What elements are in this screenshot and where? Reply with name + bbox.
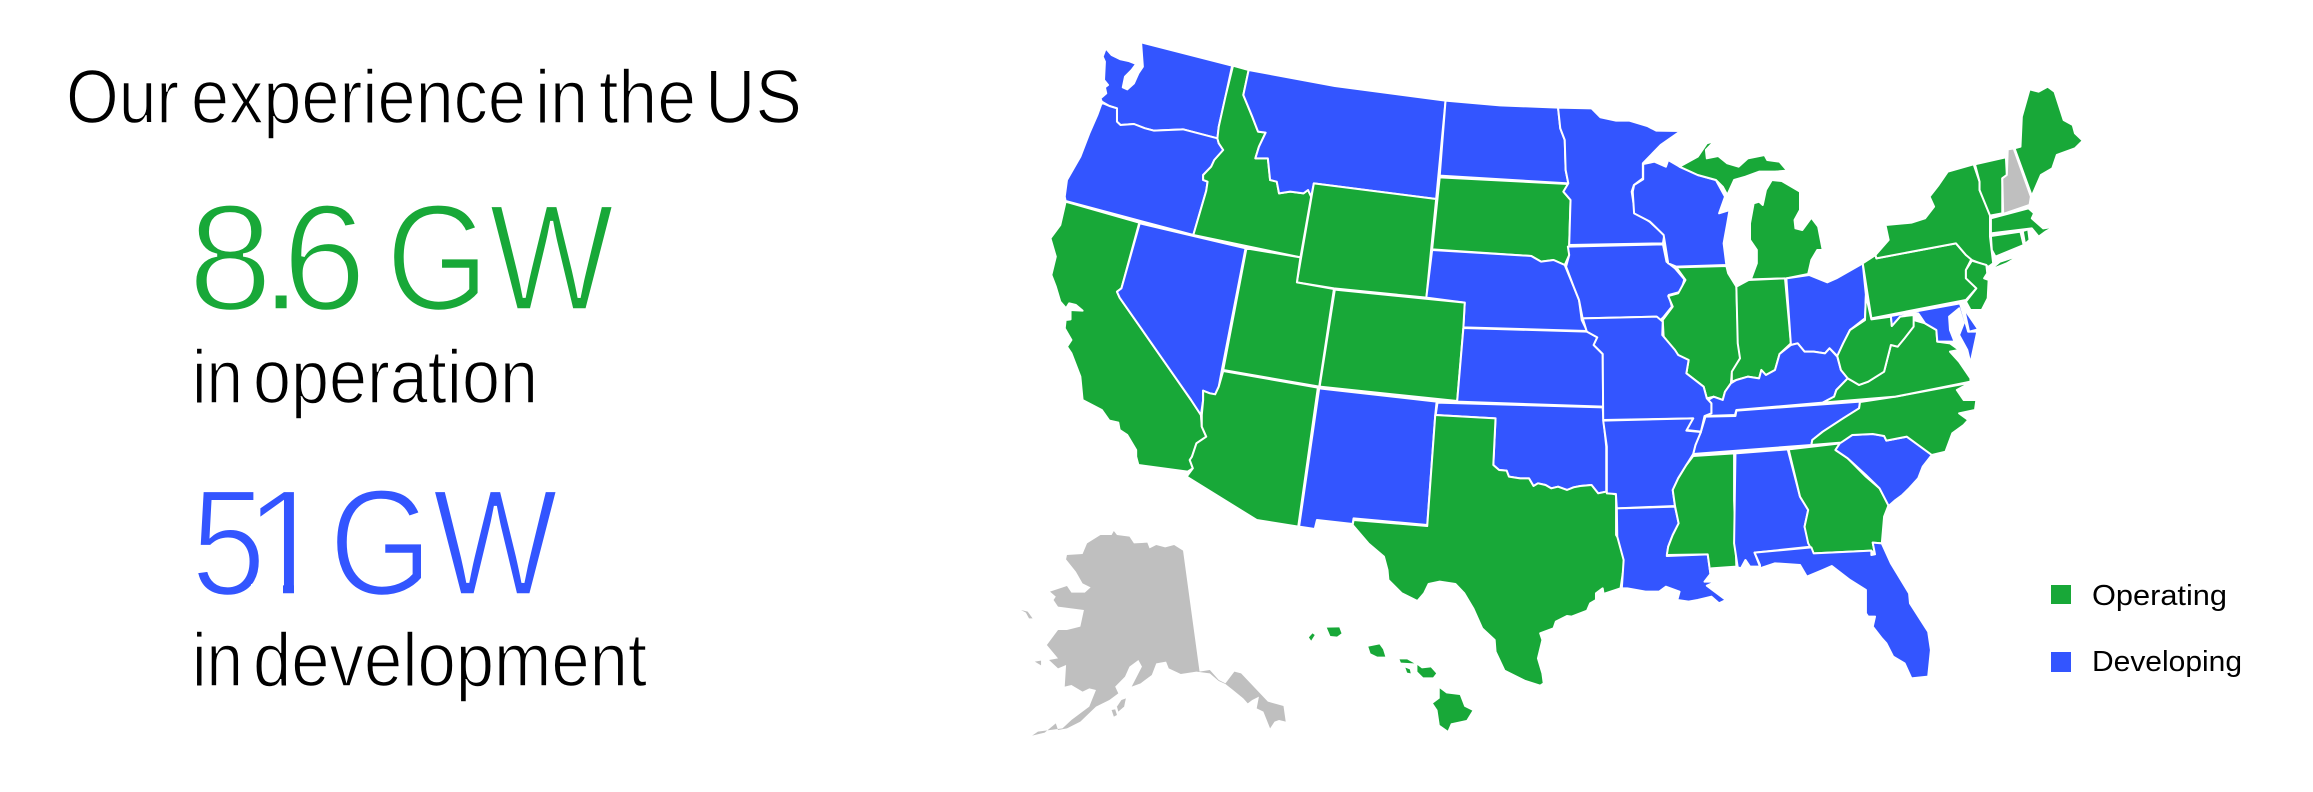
state: Minnesota (1558, 108, 1681, 245)
state: California (1050, 202, 1206, 472)
state: New Jersey (1966, 261, 1989, 310)
state: Vermont (1975, 157, 2007, 216)
state: Texas (1353, 415, 1626, 686)
title: Our (66, 55, 179, 140)
state: Oklahoma (1436, 403, 1606, 493)
state: Pennsylvania (1863, 243, 1976, 318)
state: Wisconsin (1633, 160, 1730, 267)
stat label: in operation: in (192, 335, 243, 420)
stat: 8.6 GW in operation (188, 173, 614, 420)
state: Arkansas (1603, 418, 1701, 508)
state: Rhode Island (2023, 229, 2030, 244)
state: Utah (1223, 248, 1334, 387)
title: experience (191, 55, 526, 140)
state: North Carolina (1811, 383, 1976, 455)
eastern states (1583, 87, 2083, 678)
stat: 51 GW in development (191, 458, 647, 703)
state: Georgia (1789, 443, 1889, 554)
stat value: 51 GW: GW (329, 458, 558, 628)
state: Arizona (1187, 371, 1318, 527)
state: New York, Long Island (1990, 255, 2020, 270)
stat value: 8.6 GW (188, 173, 614, 343)
state: Illinois (1663, 266, 1741, 400)
state: Hawaii (1309, 627, 1472, 731)
state: Nevada (1117, 223, 1246, 415)
stat label: in development: development (253, 618, 647, 703)
state: Wyoming (1297, 183, 1436, 298)
title (66, 55, 802, 140)
state: Kansas (1457, 328, 1603, 407)
state: North Dakota (1440, 101, 1568, 183)
state: Florida (1755, 543, 1931, 678)
state: Indiana (1732, 278, 1791, 382)
state: New Mexico (1299, 388, 1437, 529)
map: US states (1021, 42, 2083, 736)
title: the (599, 55, 696, 140)
state: Mississippi (1667, 453, 1736, 574)
state: Iowa (1566, 244, 1684, 321)
stat label: in development: in (192, 618, 243, 703)
stat label: in operation: operation (253, 335, 538, 420)
state: Alabama (1734, 449, 1811, 568)
stat value: 8.6 GW: 8.6 (188, 173, 367, 343)
state: South Carolina (1835, 434, 1932, 506)
state: Montana (1243, 70, 1446, 199)
state: Michigan upper peninsula (1680, 141, 1787, 195)
state: Delaware (1962, 301, 1978, 332)
state: Connecticut (1991, 232, 2024, 257)
state: Virginia (1823, 320, 1970, 403)
state: Oregon (1065, 103, 1223, 235)
state: Alaska (1021, 531, 1286, 736)
state: Missouri (1583, 317, 1711, 432)
state: Ohio (1786, 263, 1866, 356)
title: US (705, 55, 802, 140)
stat value: 51 GW: 5 (191, 458, 266, 628)
legend swatch: developing (2051, 652, 2071, 672)
western and central states (1021, 42, 1684, 736)
state: Nebraska (1426, 250, 1587, 331)
state: Michigan lower peninsula (1750, 180, 1823, 279)
state: Tennessee (1693, 402, 1860, 454)
state: Massachusetts (1991, 208, 2055, 237)
legend label: developing: Developing (2092, 646, 2242, 678)
state: Washington (1100, 42, 1232, 138)
state: South Dakota (1432, 177, 1571, 265)
title: in (535, 55, 588, 140)
state: Louisiana (1617, 507, 1726, 603)
legend (2051, 580, 2242, 678)
legend label: operating: Operating (2092, 580, 2227, 612)
stat value: 51 GW (191, 458, 558, 628)
state: Kentucky (1705, 343, 1848, 416)
stat value: 51 GW: 1 (244, 458, 329, 628)
state: Idaho (1193, 66, 1311, 257)
state: New York (1875, 164, 1993, 267)
legend swatch: operating (2051, 585, 2071, 604)
state: New Hampshire (2002, 148, 2031, 214)
stat value: 8.6 GW: GW (386, 173, 614, 343)
state: West Virginia (1837, 295, 1914, 385)
state: Maine (2015, 87, 2083, 196)
state: Colorado (1320, 290, 1465, 401)
state: Maryland (1891, 303, 1977, 363)
